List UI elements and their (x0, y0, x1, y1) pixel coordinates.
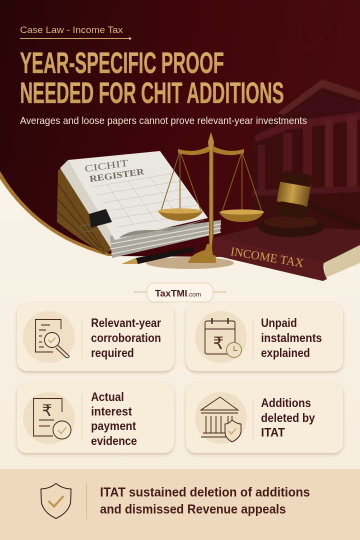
footer banner (0, 469, 360, 540)
card: additions deleted by ITAT: ITAT (261, 426, 285, 440)
brand badge: TaxTMI.com (155, 288, 201, 300)
illustration: gavel (258, 170, 360, 237)
icon: calendar with rupee (195, 311, 247, 363)
card: unpaid instalments: instalments (261, 332, 322, 345)
title: YEAR-SPECIFIC PROOF (20, 47, 224, 80)
icon: shield check (41, 484, 71, 518)
dot pattern (299, 27, 341, 49)
card: additions deleted by ITAT: Additions (261, 397, 311, 410)
card: actual interest payment evidence: Actual (91, 391, 124, 404)
footer message: and dismissed Revenue appeals (100, 502, 286, 516)
footer message (100, 484, 310, 516)
card: unpaid instalments: explained (261, 347, 310, 360)
illustration: chit register stack: REGISTER (89, 166, 145, 184)
card: relevant-year corroboration: required (91, 347, 134, 360)
illustration: income tax book (212, 225, 360, 281)
icon: rupee document with check (23, 392, 75, 444)
illustration: pen (122, 247, 195, 264)
card: additions deleted by ITAT: deleted by (261, 412, 316, 425)
kicker: Case Law - Income Tax (20, 25, 123, 36)
card: relevant-year corroboration (17, 303, 174, 371)
kicker (20, 25, 131, 40)
card: unpaid instalments (186, 303, 343, 371)
card: actual interest payment evidence: payment (91, 420, 136, 433)
icon: rupee document with check: ₹ (42, 401, 52, 420)
courthouse silhouette (252, 79, 360, 240)
card: relevant-year corroboration: Relevant-year (91, 317, 161, 330)
icon: calendar with rupee: ₹ (213, 334, 224, 354)
brand badge (134, 283, 226, 302)
curved cream base with gold edge (0, 171, 360, 540)
illustration: chit register stack (57, 151, 221, 258)
card: unpaid instalments: Unpaid (261, 317, 297, 330)
card: relevant-year corroboration: corroboration (91, 332, 161, 345)
illustration: chit register stack: CICHIT (84, 159, 129, 175)
card: actual interest payment evidence (17, 383, 174, 453)
icon: document with magnifier (23, 311, 75, 363)
card: additions deleted by ITAT (186, 383, 343, 453)
illustration: mat under scale (146, 257, 234, 269)
header background (0, 0, 360, 300)
icon: court building with shield (195, 392, 247, 444)
illustration: scales of justice (158, 132, 264, 263)
title (20, 47, 284, 110)
card: actual interest payment evidence: interest (91, 406, 132, 418)
footer message: ITAT sustained deletion of additions (100, 484, 310, 500)
illustration: income tax book: INCOME TAX (230, 244, 305, 270)
subtitle: Averages and loose papers cannot prove relevant-year investments (20, 116, 307, 127)
card: actual interest payment evidence: evidence (91, 435, 138, 448)
